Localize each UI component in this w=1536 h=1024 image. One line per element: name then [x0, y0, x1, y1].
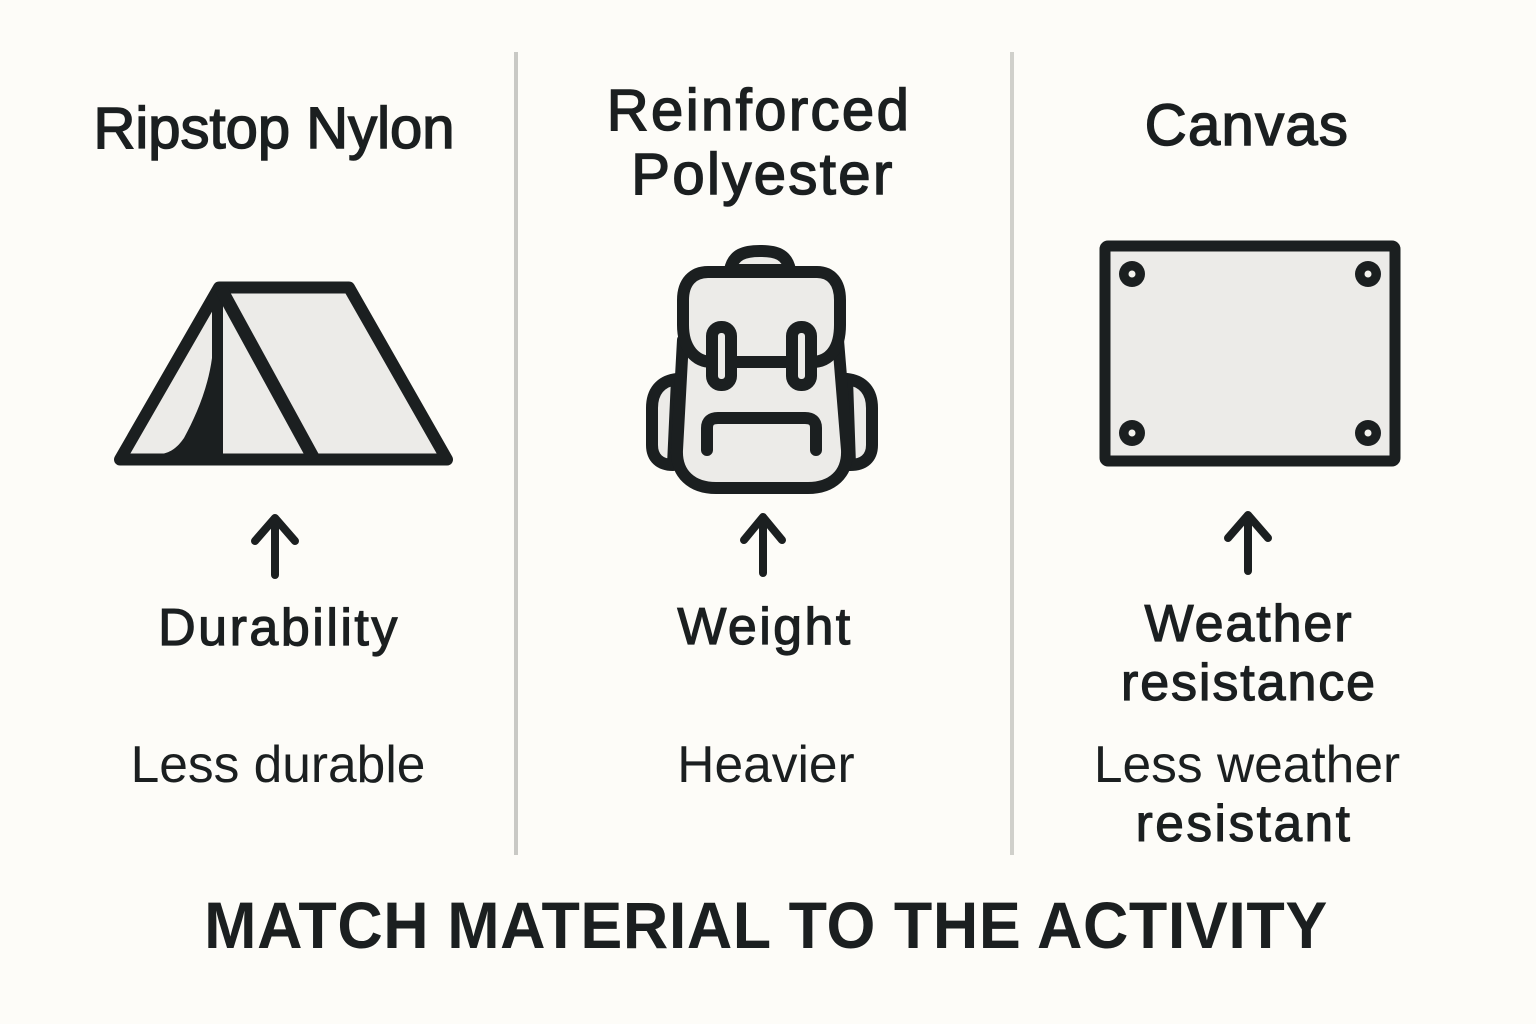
heading: reinforced polyester: Polyester	[631, 142, 895, 207]
arrow: durability	[251, 514, 299, 579]
heading: reinforced polyester	[607, 78, 911, 207]
heading: reinforced polyester: Reinforced	[607, 78, 911, 143]
note: heavier: Heavier	[677, 736, 855, 794]
icon: tent	[114, 282, 453, 466]
label: weight: Weight	[677, 598, 853, 656]
label: weather resistance: resistance	[1121, 654, 1377, 712]
arrow: weight	[740, 513, 786, 577]
note: less weather resistant: Less weather	[1094, 736, 1400, 794]
panel: canvas	[1094, 93, 1400, 853]
footer title: MATCH MATERIAL TO THE ACTIVITY	[204, 888, 1327, 962]
heading: ripstop nylon: Ripstop Nylon	[93, 96, 455, 161]
label: weather resistance: Weather	[1145, 595, 1353, 653]
label: durability: Durability	[158, 599, 400, 657]
panel: reinforced polyester	[607, 78, 911, 794]
icon: backpack	[646, 245, 878, 494]
label: weather resistance	[1121, 595, 1377, 712]
note: less durable: Less durable	[131, 736, 425, 794]
note: less weather resistant	[1094, 736, 1400, 853]
panel: ripstop nylon	[93, 96, 455, 794]
note: less weather resistant: resistant	[1136, 795, 1352, 853]
heading: canvas: Canvas	[1145, 93, 1349, 158]
